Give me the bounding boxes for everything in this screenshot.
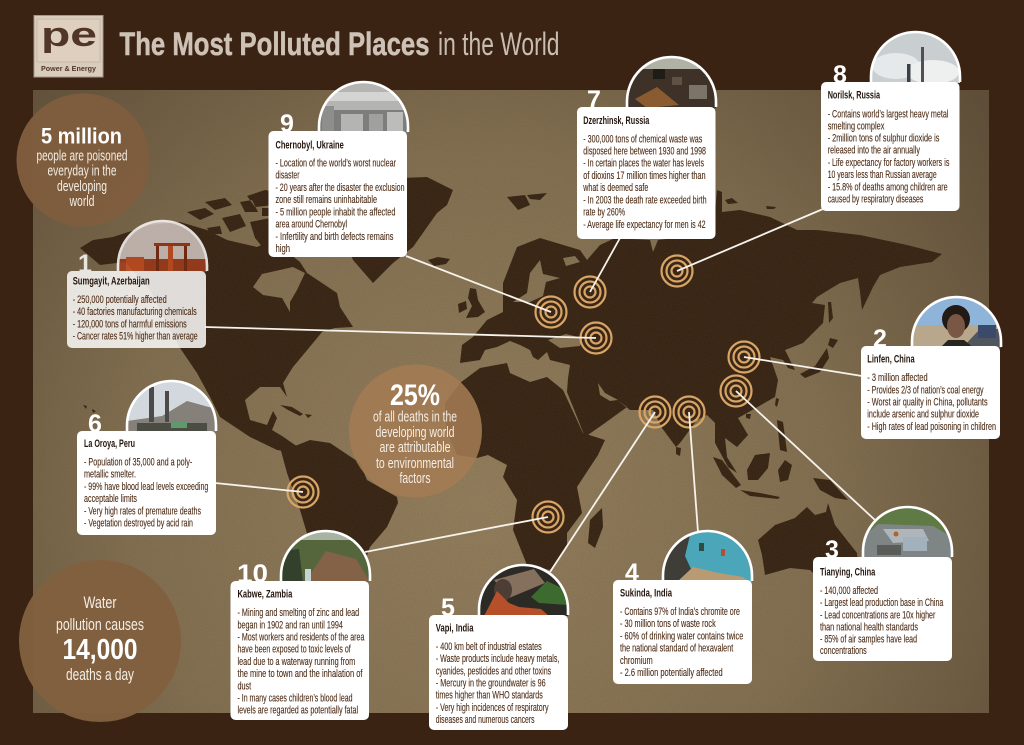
- card text: smelting complex: [828, 120, 885, 132]
- card 10: Kabwe: [230, 531, 370, 720]
- number 9: 9: [280, 110, 294, 138]
- Svalbard and Arctic islands: [507, 193, 846, 211]
- card body: [77, 431, 216, 535]
- card 1 text: - 40 factories manufacturing chemicals: [73, 306, 197, 318]
- card text: dust: [238, 680, 251, 692]
- stat circle: water pollution: Water: [84, 593, 117, 612]
- card text: [84, 438, 208, 530]
- Greenland: [342, 177, 453, 283]
- card text: - In certain places the water has levels: [583, 158, 704, 170]
- card text: - 400 km belt of industrial estates: [436, 641, 542, 653]
- number 8: 8: [833, 61, 847, 89]
- number 7: 7: [587, 86, 601, 114]
- card text: began in 1902 and ran until 1994: [238, 620, 343, 632]
- photo: polluted water: [663, 531, 752, 582]
- card text: 10 years less than Russian average: [828, 169, 937, 181]
- card text: - Population of 35,000 and a poly-: [84, 456, 193, 468]
- logo letters: pe: [41, 16, 97, 54]
- target 7: [574, 276, 606, 308]
- Iceland: [428, 257, 450, 266]
- card text: disposed here between 1930 and 1998: [583, 146, 706, 158]
- card 3: Tianying: [813, 507, 952, 661]
- Hainan and Taiwan: [746, 398, 779, 419]
- photo: abandoned city: [319, 82, 408, 133]
- card body: [429, 615, 568, 730]
- target 1: [580, 322, 612, 354]
- card 8: Norilsk: [821, 32, 961, 211]
- card text: what is deemed safe: [583, 182, 648, 194]
- world map: [80, 177, 942, 630]
- card 1: Sumgayit: [67, 221, 207, 348]
- stat circle: 25%: developing world: [376, 424, 454, 441]
- target 4: [674, 396, 704, 428]
- card text: Norilsk, Russia: [828, 90, 881, 102]
- Sri Lanka: [676, 447, 681, 456]
- card text: - 85% of air samples have lead: [820, 634, 917, 646]
- card text: - 60% of drinking water contains twice: [620, 630, 743, 642]
- card text: - Infertility and birth defects remains: [276, 231, 394, 243]
- card body: [861, 346, 1000, 439]
- stat circle: water pollution: [19, 560, 181, 722]
- logo: Power & Energy: [34, 16, 103, 77]
- photo: smokestacks: [871, 32, 961, 84]
- card text: - 2million tons of sulphur dioxide is: [828, 132, 940, 144]
- card text: the mine to town and the inhalation of: [238, 668, 363, 680]
- card body: [268, 131, 407, 257]
- Sakhalin and Japan: [800, 302, 838, 378]
- North America: [80, 222, 353, 452]
- card text: - 2.6 million potentially affected: [620, 667, 723, 679]
- card text: [828, 90, 950, 206]
- card 1 text: [73, 276, 198, 342]
- card text: area around Chernobyl: [276, 218, 347, 230]
- card text: - Lead concentrations are 10x higher: [820, 610, 936, 622]
- Africa: [445, 363, 605, 570]
- target 5: [640, 396, 670, 428]
- card text: La Oroya, Peru: [84, 438, 135, 450]
- card text: - Life expectancy for factory workers is: [828, 157, 950, 169]
- photo: refinery: [118, 221, 207, 272]
- number 5: 5: [441, 594, 455, 622]
- card body: [821, 82, 960, 211]
- UK and Ireland: [458, 288, 485, 318]
- card text: Tianying, China: [820, 566, 876, 578]
- card text: - 30 million tons of waste rock: [620, 618, 716, 630]
- stat circle: 25%: to environmental: [376, 455, 454, 472]
- title: in the World: [438, 26, 560, 62]
- card text: [620, 588, 743, 679]
- card body: [230, 581, 369, 720]
- target 8: [662, 256, 692, 286]
- card text: levels are regarded as potentially fatal: [238, 704, 358, 716]
- panel: textured map area: [33, 90, 989, 713]
- card body: [813, 557, 952, 661]
- card 9: Chernobyl: [268, 82, 408, 257]
- card body: [67, 271, 206, 348]
- card text: - Largest lead production base in China: [820, 597, 944, 609]
- stat circle: 5 million: developing: [57, 178, 107, 195]
- card 7: Dzerzhinsk: [577, 57, 716, 239]
- photo: waste pipe: [479, 565, 568, 616]
- stat circle: 25%: of all deaths in the: [373, 408, 457, 426]
- number 3: 3: [825, 536, 839, 564]
- card text: - 20 years after the disaster the exclusion: [276, 182, 404, 194]
- Madagascar: [588, 508, 603, 548]
- Australia: [758, 503, 860, 600]
- connector lines: [205, 209, 875, 572]
- photo: boy and car: [912, 297, 1001, 348]
- number 1: 1: [78, 250, 92, 278]
- card text: than national health standards: [820, 622, 918, 634]
- target 3: [720, 376, 752, 406]
- card text: Dzerzhinsk, Russia: [583, 115, 650, 127]
- card text: Kabwe, Zambia: [238, 588, 293, 600]
- card 1 text: Sumgayit, Azerbaijan: [73, 276, 150, 288]
- card text: [820, 566, 944, 657]
- card 1 text: - 120,000 tons of harmful emissions: [73, 318, 187, 330]
- card 6: La Oroya: [77, 381, 216, 535]
- photo: chemical waste rocks: [627, 57, 716, 108]
- card text: have been exposed to toxic levels of: [238, 644, 351, 656]
- Southeast Asia islands: [713, 420, 848, 500]
- card text: times higher than WHO standards: [436, 690, 543, 702]
- card text: - Most workers and residents of the area: [238, 632, 365, 644]
- photo: mining slope: [281, 531, 370, 582]
- card text: diseases and numerous cancers: [436, 714, 535, 726]
- card body: [613, 580, 752, 684]
- card text: - 300,000 tons of chemical waste was: [583, 134, 703, 146]
- card text: - Mercury in the groundwater is 96: [436, 678, 546, 690]
- card text: [276, 140, 404, 255]
- card text: - 140,000 affected: [820, 585, 878, 597]
- card text: disaster: [276, 170, 300, 182]
- South America: [280, 440, 398, 630]
- card text: [583, 115, 707, 231]
- Hawaii dots: [83, 405, 96, 413]
- card text: - 3 million affected: [867, 372, 928, 384]
- stat circle: water pollution: deaths a day: [66, 665, 134, 684]
- stat circle: 5 million: everyday in the: [48, 162, 116, 180]
- card 4: Sukinda: [613, 531, 752, 684]
- number 6: 6: [88, 410, 102, 438]
- card text: Linfen, China: [867, 354, 915, 366]
- stat circle: 5 million: [16, 94, 150, 226]
- stat circle: 25%: [349, 364, 482, 498]
- stat circle: 5 million: people are poisoned: [36, 148, 128, 164]
- Cuba: [280, 405, 312, 418]
- card text: - 5 million people inhabit the affected: [276, 206, 396, 218]
- stat circle: 25%: factors: [400, 470, 430, 487]
- card body: [577, 107, 716, 239]
- card text: - Location of the world’s worst nuclear: [276, 158, 396, 170]
- card text: Sukinda, India: [620, 588, 673, 600]
- card text: - Contains world’s largest heavy metal: [828, 108, 948, 120]
- linen texture: [33, 90, 989, 713]
- stat circle: water pollution: 14,000: [62, 634, 138, 666]
- card text: zone still remains uninhabitable: [276, 194, 377, 206]
- number 4: 4: [625, 559, 639, 587]
- photo: smelter chimneys: [127, 381, 216, 432]
- target 6: [288, 476, 318, 508]
- card text: Chernobyl, Ukraine: [276, 140, 344, 152]
- card text: - Average life expectancy for men is 42: [583, 219, 706, 231]
- title: The Most Polluted Places: [120, 26, 430, 62]
- card text: - Mining and smelting of zinc and lead: [238, 607, 359, 619]
- card text: released into the air annually: [828, 144, 920, 156]
- card text: concentrations: [820, 645, 867, 657]
- card 2: Linfen: [861, 297, 1001, 439]
- card text: - 99% have blood lead levels exceeding: [84, 481, 208, 493]
- card text: - Vegetation destroyed by acid rain: [84, 518, 193, 530]
- card text: - Waste products include heavy metals,: [436, 653, 559, 665]
- card text: - In many cases children’s blood lead: [238, 692, 352, 704]
- card text: - Very high rates of premature deaths: [84, 506, 201, 518]
- card text: cyanides, pesticides and other toxins: [436, 666, 552, 678]
- card text: [867, 354, 996, 433]
- card text: - Contains 97% of India’s chromite ore: [620, 606, 740, 618]
- card text: Vapi, India: [436, 622, 474, 634]
- card text: rate by 260%: [583, 206, 625, 218]
- card text: [238, 588, 365, 716]
- target 2: [728, 342, 760, 372]
- stat circle: 25%: are attributable: [380, 439, 450, 456]
- card text: - Very high incidences of respiratory: [436, 702, 549, 714]
- card text: - In 2003 the death rate exceeded birth: [583, 194, 707, 206]
- card text: the national standard of hexavalent: [620, 642, 733, 654]
- card 1 text: - Cancer rates 51% higher than average: [73, 330, 198, 342]
- Eurasia: [460, 190, 942, 473]
- card text: metallic smelter.: [84, 468, 136, 480]
- card text: caused by respiratory diseases: [828, 194, 924, 206]
- logo caption: Power & Energy: [41, 64, 97, 73]
- photo: trash field: [863, 507, 952, 558]
- card 1 text: - 250,000 potentially affected: [73, 294, 167, 306]
- card text: chromium: [620, 655, 653, 667]
- card text: [436, 622, 559, 726]
- card text: of dioxins 17 million times higher than: [583, 170, 706, 182]
- stat circle: 25%: 25%: [390, 379, 440, 412]
- location targets: [288, 256, 760, 532]
- number 10: 10: [237, 560, 268, 588]
- stat circle: water pollution: pollution causes: [56, 615, 144, 634]
- card text: high: [276, 243, 290, 255]
- Canadian Arctic islands: [187, 190, 280, 250]
- card text: lead due to a waterway running from: [238, 656, 355, 668]
- target 10: [532, 502, 564, 532]
- stat circle: 5 million: world: [69, 193, 94, 210]
- card 5: Vapi: [429, 565, 568, 730]
- card text: - 15.8% of deaths among children are: [828, 182, 948, 194]
- card text: acceptable limits: [84, 493, 137, 505]
- number 2: 2: [873, 325, 887, 353]
- target 9: [536, 296, 566, 328]
- stat circle: 5 million: 5 million: [41, 124, 122, 148]
